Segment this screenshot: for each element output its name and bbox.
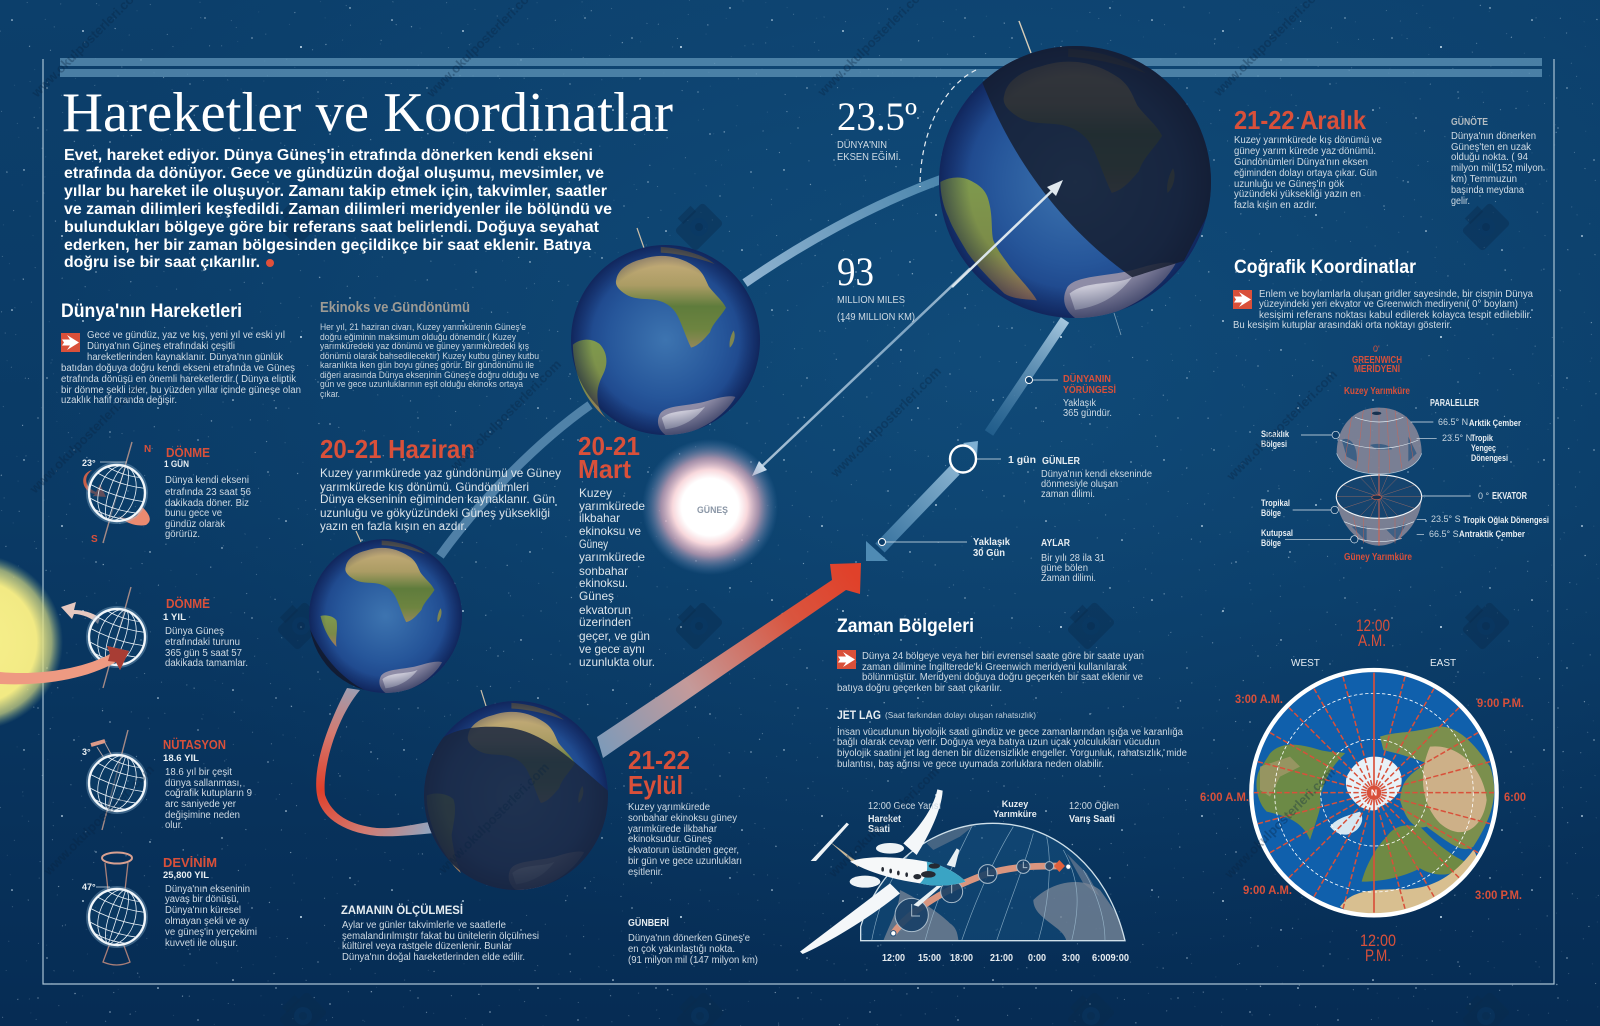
red orbit arrow <box>597 563 861 758</box>
intro paragraph: ederken, her bir zaman bölgesinden geçildikçe bir saat eklenir. Batıya <box>64 237 591 254</box>
polar map labels: 6:00 A.M. <box>1200 790 1249 804</box>
text: Zamanın Ölçülmesi <box>341 902 539 963</box>
hemisphere labels: Tropikal <box>1261 498 1290 508</box>
hemisphere labels: PARALELLER <box>1430 398 1480 409</box>
text: 20-21 Haziran: yarımkürede kış dönümü. Gündönümleri <box>320 480 529 494</box>
diagram: nutation: 3° <box>82 747 91 757</box>
section: Zaman Bölgeleri: bölünmüştür. Meridyeni doğuya doğru geçerken bir saat eklenir ve <box>862 672 1143 683</box>
hemisphere labels: Arktik Çember <box>1469 418 1521 428</box>
text: DÖNME 1 YIL: DÖNME <box>166 596 210 611</box>
text: NÜTASYON: dünya sallanması, <box>165 778 242 789</box>
section: Jet Lag: (Saat farkından dolayı oluşan rahatsızlık) <box>885 711 1036 720</box>
website watermarks <box>26 0 1340 882</box>
section: Ekinoks ve Gündönümü: yarımküredeki yaz dönümü ve güney yarımküredeki kış <box>320 341 529 351</box>
section: Zaman Bölgeleri <box>837 616 1144 694</box>
section: Jet Lag: biyolojik saatini jet lag denen bir düzensizlikle engeller. Yorgunluk, rahatsızlık, mide <box>837 748 1187 759</box>
southern hemisphere <box>1336 474 1422 546</box>
meridians <box>1254 673 1494 913</box>
text: NÜTASYON: değişimine neden <box>165 810 240 821</box>
text: DÖNME 1 GÜN: gündüz olarak <box>165 519 226 530</box>
section: Zaman Bölgeleri: zaman dilimine İngilterede'ki Greenwich meridyeni kullanılarak <box>862 660 1128 673</box>
text: 21-22 Eylül: yarımkürede ilkbahar <box>628 824 718 835</box>
text: DÖNME 1 YIL: 365 gün 5 saat 57 <box>165 648 242 659</box>
polar map labels: 3:00 P.M. <box>1475 888 1522 902</box>
text: 21-22 Aralık: Kuzey yarımkürede kış dönümü ve <box>1234 135 1382 146</box>
jet lag time axis <box>882 953 1129 964</box>
hemisphere labels: EKVATOR <box>1492 491 1528 502</box>
hemisphere labels: Antraktik Çember <box>1459 529 1525 539</box>
text: DÖNME 1 YIL <box>163 596 248 669</box>
website watermarks: www.okulposterleri.com <box>1221 765 1338 882</box>
text: Zamanın Ölçülmesi: kültürel veya rastgele düzenlenir. Bunlar <box>342 941 513 952</box>
landmasses <box>1256 727 1494 916</box>
text: 20-21 Mart: ekinoksu. <box>579 576 628 590</box>
section: Zaman Bölgeleri: batıya doğru geçerken bir saat çıkarılır. <box>837 683 1002 694</box>
text: 20-21 Mart <box>578 431 655 669</box>
diagram: yearly revolution <box>0 587 152 688</box>
polar map labels: 6:00 <box>1504 790 1526 804</box>
polar map labels: 9:00 P.M. <box>1477 696 1524 710</box>
text: 21-22 Eylül <box>628 745 742 878</box>
intro paragraph: Evet, hareket ediyor. Dünya Güneş'in etrafında dönerken kendi ekseni <box>64 147 593 164</box>
polar map labels: WEST <box>1291 658 1320 669</box>
section: Coğrafik Koordinatlar: Coğrafik Koordinatlar <box>1234 257 1417 278</box>
hemisphere labels: 0 ° <box>1478 491 1490 501</box>
polar map labels: 12:00 <box>1356 616 1390 635</box>
diagram: hemispheres <box>1285 408 1471 546</box>
text: Zamanın Ölçülmesi: ZAMANIN ÖLÇÜLMESİ <box>341 902 463 917</box>
text: NÜTASYON: NÜTASYON <box>163 737 226 752</box>
section: Jet Lag: JET LAG <box>837 708 881 722</box>
clocks <box>895 860 1054 932</box>
section: Ekinoks ve Gündönümü: diğeri arasında Dünya ekseninin Güneş'e doğru olduğu ve <box>320 370 539 380</box>
red orbit curve <box>316 688 435 836</box>
jet lag map labels: 12:00 Öğlen <box>1069 800 1119 812</box>
text: Günöte: GÜNÖTE <box>1451 115 1488 128</box>
polar map labels: 12:00 <box>1360 931 1396 950</box>
text: 20-21 Mart: ve gece aynı <box>579 642 645 656</box>
label: months: AYLAR <box>1041 538 1071 549</box>
section: Coğrafik Koordinatlar: kesişimi referans noktası kabul edilerek kolayca tespit edilebilir. <box>1259 310 1532 321</box>
website watermarks: www.okulposterleri.com <box>26 380 143 497</box>
label: months: Bir yılı 28 ila 31 <box>1041 553 1105 564</box>
text: NÜTASYON: 18.6 yıl bir çeşit <box>165 767 232 778</box>
text: Günöte: olduğu nokta. ( 94 <box>1451 152 1528 163</box>
jet lag map labels: 12:00 Gece Yarısı <box>868 801 941 812</box>
text: 21-22 Aralık: güney yarım kürede yaz dönümü. <box>1234 146 1376 157</box>
text: 21-22 Eylül: eşitlenir. <box>628 867 663 878</box>
axial tilt dashed arc <box>920 70 976 187</box>
intro paragraph: doğru ise bir saat çıkarılır. <box>64 254 260 271</box>
intro paragraph <box>64 147 612 271</box>
section: Coğrafik Koordinatlar: Enlem ve boylamlarla oluşan gridler sayesinde, bir cismin Dünya <box>1259 289 1533 300</box>
section: Dünya'nın Hareketleri: Dünya'nın Güneş etrafındaki çeşitli <box>87 341 235 352</box>
text: 20-21 Mart: ekvatorun <box>579 603 631 617</box>
text: 21-22 Eylül: 21-22 <box>628 745 690 775</box>
text: 20-21 Mart: sonbahar <box>579 564 628 578</box>
text: 21-22 Eylül: ekinoksudur. Güneş <box>628 834 712 845</box>
jet lag map labels: Kuzey <box>1002 799 1028 809</box>
diagram: polar time zone map <box>1251 670 1497 916</box>
text: DÖNME 1 GÜN: DÖNME <box>166 445 210 460</box>
text: distance 93: 93 <box>837 249 874 294</box>
polar map labels: EAST <box>1430 658 1456 669</box>
jet lag map labels: Yarımküre <box>993 809 1037 819</box>
text: 21-22 Aralık: yüzündeki yüksekliği yazın en <box>1234 189 1361 200</box>
text: DEVİNİM: ve güneş'in yerçekimi <box>165 927 257 938</box>
label: orbit of the Earth: 365 gündür. <box>1063 408 1112 419</box>
website watermarks: www.okulposterleri.com <box>827 364 944 481</box>
section: Coğrafik Koordinatlar: yüzeyindeki yeri ekvator ve Greenwich mediryeni( 0° boylam) <box>1259 299 1518 310</box>
text: distance 93 <box>837 249 915 323</box>
dashed parallels <box>1275 693 1473 892</box>
section: Zaman Bölgeleri: Zaman Bölgeleri <box>837 616 974 637</box>
jet lag map labels: Saati <box>868 824 890 835</box>
text: distance 93: (149 MILLION KM) <box>837 312 915 323</box>
text: 21-22 Eylül: Eylül <box>628 770 683 800</box>
text: NÜTASYON: coğrafik kutupların 9 <box>165 788 252 799</box>
text: DEVİNİM: Dünya'nın ekseninin <box>165 884 250 895</box>
text: 20-21 Mart: geçer, ve gün <box>579 629 650 643</box>
text: DEVİNİM: olmayan şekli ve ay <box>165 916 249 927</box>
title: Hareketler ve Koordinatlar <box>62 82 673 144</box>
text: 21-22 Aralık: fazla kışın en azdır. <box>1234 200 1317 211</box>
hemisphere labels: Tropik <box>1471 433 1494 443</box>
label: months: güne bölen <box>1041 563 1088 574</box>
section: Ekinoks ve Gündönümü: dönümü olarak bahsedilecektir) Kuzey kutbu güney kutbu <box>320 351 539 361</box>
hemisphere labels: Sıcaklık <box>1261 429 1290 439</box>
north pole marker <box>1367 785 1381 800</box>
text: DEVİNİM: 25,800 YIL <box>163 870 210 880</box>
hemisphere labels: Kutupsal <box>1261 528 1293 538</box>
text: 20-21 Mart: Mart <box>578 454 631 484</box>
section: Dünya'nın Hareketleri <box>61 301 301 406</box>
text: 20-21 Haziran: uzunluğu ve gökyüzündeki Güneş yüksekliği <box>320 506 550 520</box>
section: Dünya'nın Hareketleri: Dünya'nın Hareketleri <box>61 301 242 322</box>
text: 21-22 Eylül: sonbahar ekinoksu güney <box>628 813 737 824</box>
polar map labels: A.M. <box>1358 631 1386 650</box>
hemisphere labels: 23.5° N <box>1442 433 1472 443</box>
section: Jet Lag: bağlı olarak cevap verir. Doğuya veya batıya uzun uçak yolculukları vücudun <box>837 737 1160 748</box>
label: one day: dönmesiyle oluşan <box>1041 479 1118 490</box>
route endpoints <box>891 860 1071 936</box>
jet lag time axis: 3:00 <box>1062 953 1080 964</box>
text: 20-21 Mart: ekinoksu ve <box>579 524 641 538</box>
polar map labels <box>1200 616 1526 965</box>
text: 20-21 Mart: yarımkürede <box>579 550 645 564</box>
sun at left edge <box>0 554 63 730</box>
text: DEVİNİM: DEVİNİM <box>163 855 217 870</box>
section: Coğrafik Koordinatlar <box>1233 257 1533 331</box>
section: Jet Lag <box>837 708 1187 770</box>
text: Günöte: milyon mil(152 milyon <box>1451 163 1543 174</box>
orbit bands <box>440 178 1065 561</box>
hemisphere labels <box>1261 344 1549 563</box>
text: Günöte <box>1451 115 1543 207</box>
label: months: Zaman dilimi. <box>1041 573 1096 584</box>
text: Günberi: (91 milyon mil (147 milyon km) <box>628 955 758 966</box>
text: 21-22 Eylül: Kuzey yarımkürede <box>628 802 710 813</box>
section: Jet Lag: İnsan vücudunun biyolojik saati gündüz ve gece zamanlarından ışığa ve karanlığa <box>837 725 1183 738</box>
text: NÜTASYON: 18.6 YIL <box>163 753 200 763</box>
website watermarks: www.okulposterleri.com <box>40 762 157 879</box>
diagram: precession <box>82 852 152 965</box>
section: Jet Lag: bulantısı, baş ağrısı ve gece uyumada zorluklara neden olabilir. <box>837 759 1104 770</box>
diagram: daily rotation: 23° <box>82 458 96 468</box>
label: orbit of the Earth: YÖRÜNGESİ <box>1063 383 1116 396</box>
intro paragraph: yıllar bu hareket ile oluşuyor. Zamanı takip etmek için, takvimler, saatler <box>64 183 607 200</box>
text: Günöte: başında meydana <box>1451 185 1524 196</box>
diagram: precession: 47° <box>82 882 96 892</box>
hemisphere labels: Bölge <box>1261 538 1281 548</box>
sun rays beam arrow <box>752 187 1056 476</box>
text: DÖNME 1 YIL: dakikada tamamlar. <box>165 658 248 669</box>
hemisphere labels: GREENWICH <box>1352 355 1402 366</box>
label: months <box>878 537 1105 584</box>
text: 20-21 Mart: Güney <box>579 537 608 551</box>
text: 20-21 Haziran <box>320 434 561 533</box>
hemisphere labels: Güney Yarımküre <box>1344 552 1412 563</box>
text: axial tilt 23.5: 23.5º <box>837 94 917 139</box>
text: 20-21 Mart: Güneş <box>579 589 614 603</box>
polar map labels: P.M. <box>1365 946 1391 965</box>
text: DÖNME 1 YIL: Dünya Güneş <box>165 626 224 637</box>
jet lag time axis: 18:00 <box>950 953 973 964</box>
website watermarks: www.okulposterleri.com <box>825 764 942 881</box>
section: Ekinoks ve Gündönümü: çıkar. <box>320 389 340 399</box>
website watermarks: www.okulposterleri.com <box>435 760 552 877</box>
label: one day: Dünya'nın kendi ekseninde <box>1041 469 1152 480</box>
text: Zamanın Ölçülmesi: Aylar ve günler takvimlerle ve saatlerle <box>342 920 506 931</box>
website watermarks: www.okulposterleri.com <box>447 357 564 474</box>
label: orbit of the Earth: DÜNYANIN <box>1063 372 1111 385</box>
section: Dünya'nın Hareketleri: Gece ve gündüz, yaz ve kış, yeni yıl ve eski yıl <box>87 330 285 341</box>
intro paragraph: bulundukları bölgeye göre bir referans saat belirlendi. Doğuya seyahat <box>64 219 599 236</box>
text: Günberi: Dünya'nın dönerken Güneş'e <box>628 933 750 944</box>
diagram: jet lag flight map <box>800 789 1127 954</box>
text: NÜTASYON: olur. <box>165 820 183 831</box>
text: DÖNME 1 GÜN: Dünya kendi ekseni <box>165 475 249 486</box>
hemisphere labels: MERİDYENİ <box>1354 362 1400 375</box>
text: DÖNME 1 YIL: etrafındaki turunu <box>165 637 240 648</box>
text: DEVİNİM: Dünya'nın küresel <box>165 905 241 916</box>
hemisphere labels: 23.5° S <box>1431 514 1461 524</box>
label: one day: zaman dilimi. <box>1041 489 1095 500</box>
jet lag map labels <box>868 799 1119 835</box>
intro paragraph: etrafında da dönüyor. Gece ve gündüzün doğal oluşumu, mevsimler, ve <box>64 165 604 182</box>
section: Ekinoks ve Gündönümü: gün ve gece uzunluklarının eşit olduğu ekinoks ortaya <box>320 379 523 389</box>
label: one day: 1 gün <box>1008 455 1036 466</box>
label: one day <box>950 446 1152 500</box>
jet lag time axis: 12:00 <box>882 953 905 964</box>
jet lag map labels: Hareket <box>868 814 902 825</box>
text: DÖNME 1 GÜN: görürüz. <box>165 529 200 540</box>
text: Günöte: Dünya'nın dönerken <box>1451 131 1536 142</box>
text: Zamanın Ölçülmesi: şemalandırılmıştır fakat bu ünitelerin ölçülmesi <box>342 931 539 942</box>
earth: June <box>305 531 462 697</box>
text: 20-21 Haziran: 20-21 Haziran <box>320 434 475 464</box>
polar map labels: 3:00 A.M. <box>1235 692 1283 706</box>
section: Ekinoks ve Gündönümü <box>320 299 539 399</box>
callout lines <box>1285 422 1471 543</box>
text: 20-21 Mart: 20-21 <box>578 431 640 461</box>
hemisphere labels: Bölge <box>1261 508 1281 518</box>
sun <box>642 439 778 575</box>
diagram: daily rotation: N <box>144 444 151 455</box>
section: Ekinoks ve Gündönümü: Ekinoks ve Gündönümü <box>320 299 470 316</box>
text: Zamanın Ölçülmesi: Dünya'nın doğal hareketlerinden elde edilir. <box>342 952 525 963</box>
text: distance 93: MILLION MILES <box>837 295 905 306</box>
hemisphere labels: Yengeç <box>1471 443 1496 453</box>
label: orbit of the Earth: Yaklaşık <box>1063 398 1097 409</box>
intro paragraph: ve zaman dilimleri keşfedildi. Zaman dilimleri meridyenler ile bölündü ve <box>64 201 612 218</box>
website watermarks: www.okulposterleri.com <box>1223 367 1340 484</box>
text: 20-21 Haziran: Dünya ekseninin eğiminden kaynaklanır. Gün <box>320 492 555 506</box>
label: months: 30 Gün <box>973 548 1005 559</box>
text: 21-22 Eylül: ekvatorun üstünden geçer, <box>628 845 739 856</box>
jet lag time axis: 6:009:00 <box>1092 953 1129 964</box>
section: Zaman Bölgeleri: Dünya 24 bölgeye veya her biri evrensel saate göre bir saate uyan <box>862 651 1144 662</box>
text: DEVİNİM: yavaş bir dönüşü, <box>165 894 239 905</box>
polar map labels: 9:00 A.M. <box>1243 883 1292 897</box>
jet lag map labels: Varış Saati <box>1069 814 1115 825</box>
hemisphere labels: 66.5° S <box>1429 529 1459 539</box>
text: NÜTASYON <box>163 737 252 831</box>
text: DÖNME 1 YIL: 1 YIL <box>163 612 187 622</box>
text: DÖNME 1 GÜN: bunu gece ve <box>165 508 222 519</box>
section: Dünya'nın Hareketleri: hareketlerinden kaynaklanır. Dünya'nın günlük <box>87 352 284 363</box>
earth: September <box>424 690 608 890</box>
text: Günöte: gelir. <box>1451 196 1470 207</box>
text: 20-21 Mart: yarımkürede <box>579 499 645 513</box>
label: months: Yaklaşık <box>973 537 1010 548</box>
flight path <box>893 866 1060 933</box>
hemisphere labels: Tropik Oğlak Dönengesi <box>1463 515 1549 525</box>
section: Coğrafik Koordinatlar: Bu kesişim kutuplar arasındaki orta noktayı gösterir. <box>1233 320 1452 331</box>
text: 20-21 Haziran: yazın en fazla kışın en azdır. <box>320 519 467 533</box>
text: 20-21 Mart: ilkbahar <box>579 511 620 525</box>
text: Günberi <box>628 916 758 966</box>
jet lag time axis: 0:00 <box>1028 953 1046 964</box>
text: Günberi: en çok yakınlaştığı nokta. <box>628 944 735 955</box>
text: DEVİNİM: kuvveti ile oluşur. <box>165 938 238 949</box>
beam over december earth <box>952 180 1063 287</box>
text: 20-21 Mart: uzunlukta olur. <box>579 655 655 669</box>
text: 21-22 Aralık: uzunluğu ve Güneş'in gök <box>1234 179 1345 190</box>
dome map <box>861 823 1127 943</box>
jet lag time axis: 21:00 <box>990 953 1013 964</box>
hemisphere labels: Bölgesi <box>1261 439 1287 449</box>
earth: December <box>939 21 1225 335</box>
earth: March <box>571 228 760 435</box>
text: 20-21 Mart: üzerinden <box>579 615 631 629</box>
text: DÖNME 1 GÜN <box>164 445 251 540</box>
label: one day: GÜNLER <box>1042 454 1081 467</box>
section: Ekinoks ve Gündönümü: karanlıkta iken gün boyu güneş görür. Bir gündönümü ile <box>320 360 534 370</box>
diagram: nutation <box>82 730 152 830</box>
text: 21-22 Aralık: Gündönümleri Dünya'nın eksen <box>1234 157 1368 168</box>
sun: GÜNEŞ <box>697 505 728 515</box>
section: Dünya'nın Hareketleri: batıdan doğuya doğru kendi ekseni etrafında ve Güneş <box>61 363 295 374</box>
text: axial tilt 23.5: EKSEN EĞİMİ. <box>837 150 901 163</box>
text: axial tilt 23.5: DÜNYA'NIN <box>837 139 887 151</box>
text: DÖNME 1 GÜN: dakikada döner. Biz <box>165 498 249 509</box>
text: DÖNME 1 GÜN: etrafında 23 saat 56 <box>165 487 251 498</box>
text: 21-22 Aralık: 21-22 Aralık <box>1234 105 1366 135</box>
polar ice <box>1346 757 1402 811</box>
diagram: daily rotation <box>82 442 152 545</box>
text: NÜTASYON: arc saniyede yer <box>165 799 237 810</box>
text: 20-21 Mart: Kuzey <box>579 486 612 500</box>
text: Günöte: Güneş'ten en uzak <box>1451 142 1532 153</box>
text: DEVİNİM <box>163 855 257 949</box>
text: 21-22 Aralık <box>1234 105 1382 211</box>
hemisphere labels: 66.5° N <box>1438 417 1468 427</box>
section: Dünya'nın Hareketleri: uzaklık hafif oranda değişir. <box>61 395 177 406</box>
diagram: daily rotation: S <box>91 534 98 545</box>
airplane <box>800 789 966 954</box>
text: 21-22 Eylül: bir gün ve gece uzunlukları <box>628 856 742 867</box>
north pole marker: N <box>1371 788 1377 798</box>
hemisphere labels: Dönengesi <box>1471 453 1508 463</box>
section: Dünya'nın Hareketleri: bir dönme şekli izler, bu yüzden yıllar içinde güneşe olan <box>61 385 301 396</box>
section: Ekinoks ve Gündönümü: Her yıl, 21 haziran civarı, Kuzey yarımkürenin Güneş'e <box>320 322 526 332</box>
text: 20-21 Haziran: Kuzey yarımkürede yaz gündönümü ve Güney <box>320 466 561 480</box>
jet lag time axis: 15:00 <box>918 953 941 964</box>
label: orbit of the Earth <box>1026 372 1116 419</box>
northern hemisphere <box>1337 408 1422 474</box>
hemisphere labels: 0' <box>1373 344 1380 354</box>
text: Günberi: GÜNBERİ <box>628 916 669 929</box>
section: Dünya'nın Hareketleri: etrafında dönüşü en önemli hareketlerdir.( Dünya eliptik <box>61 374 297 385</box>
text: DÖNME 1 GÜN: 1 GÜN <box>164 459 189 469</box>
section: Ekinoks ve Gündönümü: doğru eğiminin maksimum olduğu dönemdir.( Kuzey <box>320 332 516 342</box>
text: 21-22 Aralık: eğiminden dolayı ortaya çıkar. Gün <box>1234 168 1377 179</box>
text: Günöte: km) Temmuzun <box>1451 174 1517 185</box>
hemisphere labels: Kuzey Yarımküre <box>1344 386 1410 397</box>
text: axial tilt 23.5 <box>837 94 917 163</box>
camera watermarks <box>272 193 1511 1026</box>
